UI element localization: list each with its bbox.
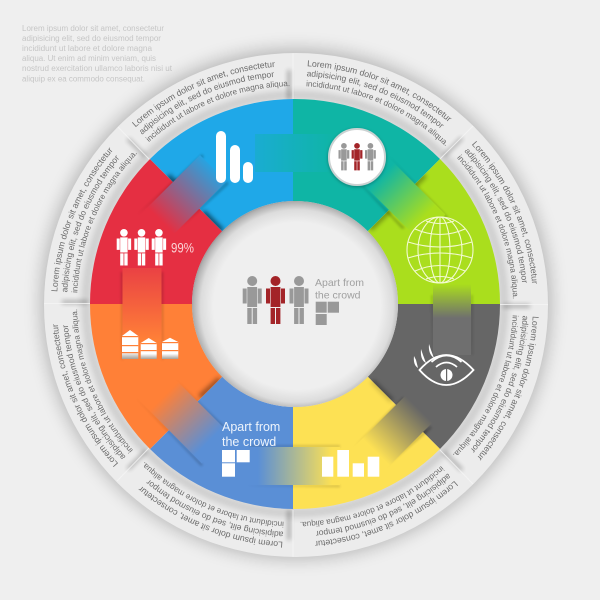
text panel: right lower: Lorem ipsum dolor sit amet, consectetur (478, 316, 539, 460)
text panel: upper left: incididunt ut labore et dolore magna aliqua. (146, 81, 290, 142)
intro text block: nostrud exercitation ullamco laboris nisi ut (22, 64, 173, 73)
intro text block: incididunt ut labore et dolore magna (22, 44, 153, 53)
label: apart from the crowd on blue: Apart from (222, 420, 280, 434)
text panel: upper right: Lorem ipsum dolor sit amet, consectetur (308, 60, 452, 122)
text panel: lower right: adipisicing elit, sed do eiusmod tempor (316, 474, 450, 536)
text panel: right upper: Lorem ipsum dolor sit amet, consectetur (472, 141, 537, 284)
icon: centre people (243, 276, 308, 324)
ribbon: red to sky blue (145, 155, 226, 236)
ribbon: sky blue to teal (255, 134, 347, 172)
icon: globe (407, 217, 473, 283)
ribbon: green to grey (433, 283, 471, 355)
label: 99 percent: 99% (171, 240, 194, 256)
text panel: left upper: Lorem ipsum dolor sit amet, consectetur (51, 148, 112, 292)
text panel: lower left: adipisicing elit, sed do eiusmod tempor (146, 480, 284, 538)
ribbon edge shadows (121, 154, 472, 487)
text panel: right lower: adipisicing elit, sed do eiusmod tempor (471, 316, 528, 453)
intro text block: aliquip ex ea commodo consequat. (22, 74, 145, 84)
segment: green (368, 159, 500, 304)
icon: white people (117, 229, 166, 265)
segment: grey (368, 304, 500, 449)
text panel: lower left: incididunt ut labore et dolore magna aliqua. (144, 462, 284, 528)
text panel: upper left: adipisicing elit, sed do eiusmod tempor (140, 72, 274, 134)
label: apart from the crowd on blue: the crowd (222, 435, 276, 449)
centre label (315, 277, 364, 302)
ribbon: teal to green (347, 142, 446, 240)
segment: sky blue (150, 99, 293, 231)
ribbon: orange to red (122, 268, 162, 360)
text panel: lower left: Lorem ipsum dolor sit amet, consectetur (138, 486, 282, 548)
ribbon: grey to yellow (354, 384, 444, 474)
segment: teal (293, 99, 440, 231)
centre label: the crowd (315, 290, 361, 302)
icon: white squares (222, 450, 250, 477)
icon: eye (414, 344, 474, 385)
intro text block: adipisicing elit, sed do eiusmod tempor (22, 34, 161, 43)
icon: people badge (329, 129, 385, 185)
text panel: right upper: incididunt ut labore et dolore magna aliqua. (457, 154, 518, 298)
icon: bar chart rounded (216, 131, 253, 183)
intro text block: Lorem ipsum dolor sit amet, consectetur (22, 24, 164, 33)
outer disc (42, 52, 550, 558)
outer disc shadow (42, 50, 550, 558)
label: apart from the crowd on blue (222, 420, 280, 449)
segment: red (90, 159, 222, 304)
icon: grey squares (316, 302, 339, 325)
ribbon: blue to orange (137, 370, 223, 464)
text panel: right upper: adipisicing elit, sed do eiusmod tempor (464, 149, 527, 283)
text panel: left lower: Lorem ipsum dolor sit amet, consectetur (53, 324, 118, 467)
text panel: left upper: incididunt ut labore et dolore magna aliqua. (71, 153, 137, 292)
icon: buildings (122, 330, 178, 359)
text panel: left upper: adipisicing elit, sed do eiusmod tempor (62, 155, 119, 292)
text panel: left lower: incididunt ut labore et dolore magna aliqua. (72, 310, 133, 454)
text panel: right lower: incididunt ut labore et dolore magna aliqua. (453, 316, 519, 455)
colour ring (90, 99, 500, 509)
intro text block (22, 24, 173, 84)
centre label: Apart from (315, 277, 364, 289)
building stripes (122, 336, 178, 353)
icon: yellow bar chart (322, 450, 379, 477)
text panel: lower right: Lorem ipsum dolor sit amet, consectetur (315, 481, 458, 546)
text panel: upper right: incididunt ut labore et dolore magna aliqua. (306, 80, 446, 146)
segment: blue (150, 377, 293, 509)
segment: yellow (293, 377, 440, 509)
text panel: lower right: incididunt ut labore et dolore magna aliqua. (300, 466, 444, 527)
inner hole (192, 201, 398, 407)
intro text block: aliqua. Ut enim ad minim veniam, quis (22, 54, 156, 63)
segment: orange (90, 304, 222, 449)
ribbon: yellow to blue (250, 447, 340, 485)
text panel: upper right: adipisicing elit, sed do eiusmod tempor (306, 70, 444, 128)
text panel: upper left: Lorem ipsum dolor sit amet, consectetur (132, 62, 275, 127)
text panel: left lower: adipisicing elit, sed do eiusmod tempor (63, 325, 126, 459)
